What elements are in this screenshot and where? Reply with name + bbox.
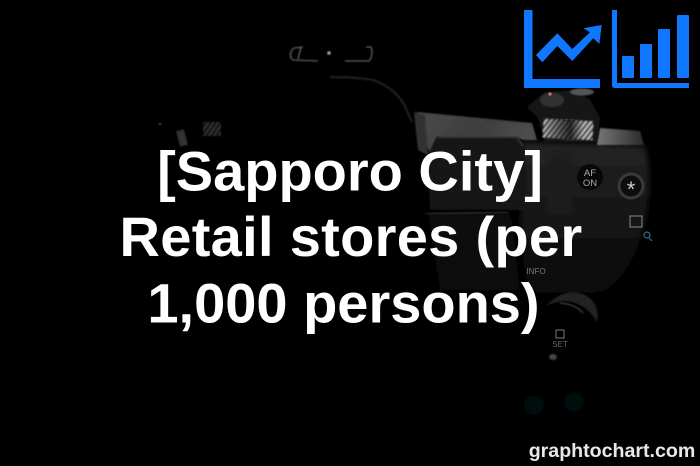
camera viewfinder hot shoe: [290, 47, 372, 61]
camera top dial: [527, 88, 644, 145]
camera lower panel: [428, 212, 520, 290]
icon: line chart: [524, 10, 602, 88]
camera mid panel top highlight: [438, 137, 523, 146]
camera rear dial: [546, 292, 598, 360]
camera rear dial: SET: [552, 340, 568, 349]
title: [120, 140, 582, 334]
camera body right side: [520, 142, 649, 300]
camera bottom buttons: [524, 392, 584, 415]
camera magnifier icon: [644, 232, 652, 241]
camera grid button: [630, 216, 642, 227]
title: 1,000 persons): [147, 272, 540, 334]
camera left dial: [158, 122, 221, 147]
camera eyecup edge: [414, 112, 428, 155]
title: [Sapporo City]: [157, 140, 543, 202]
camera lower panel highlight: [425, 212, 508, 214]
camera AF-ON button: ON: [583, 178, 597, 189]
camera AF-ON button: AF: [584, 168, 596, 179]
hot shoe center pin: [327, 51, 331, 55]
title: Retail stores (per: [120, 205, 582, 268]
camera AF-ON button: [577, 164, 603, 190]
camera top plate: [417, 112, 537, 153]
camera grip texture: [547, 155, 572, 215]
camera INFO label: INFO: [526, 267, 546, 276]
camera photo: [158, 47, 652, 415]
camera star button: *: [627, 177, 636, 202]
camera mid panel: [428, 137, 528, 210]
watermark: graphtochart.com: [529, 440, 695, 462]
camera viewfinder outline: [330, 77, 412, 122]
icon: bar chart: [612, 10, 689, 88]
camera star button: [619, 174, 643, 202]
